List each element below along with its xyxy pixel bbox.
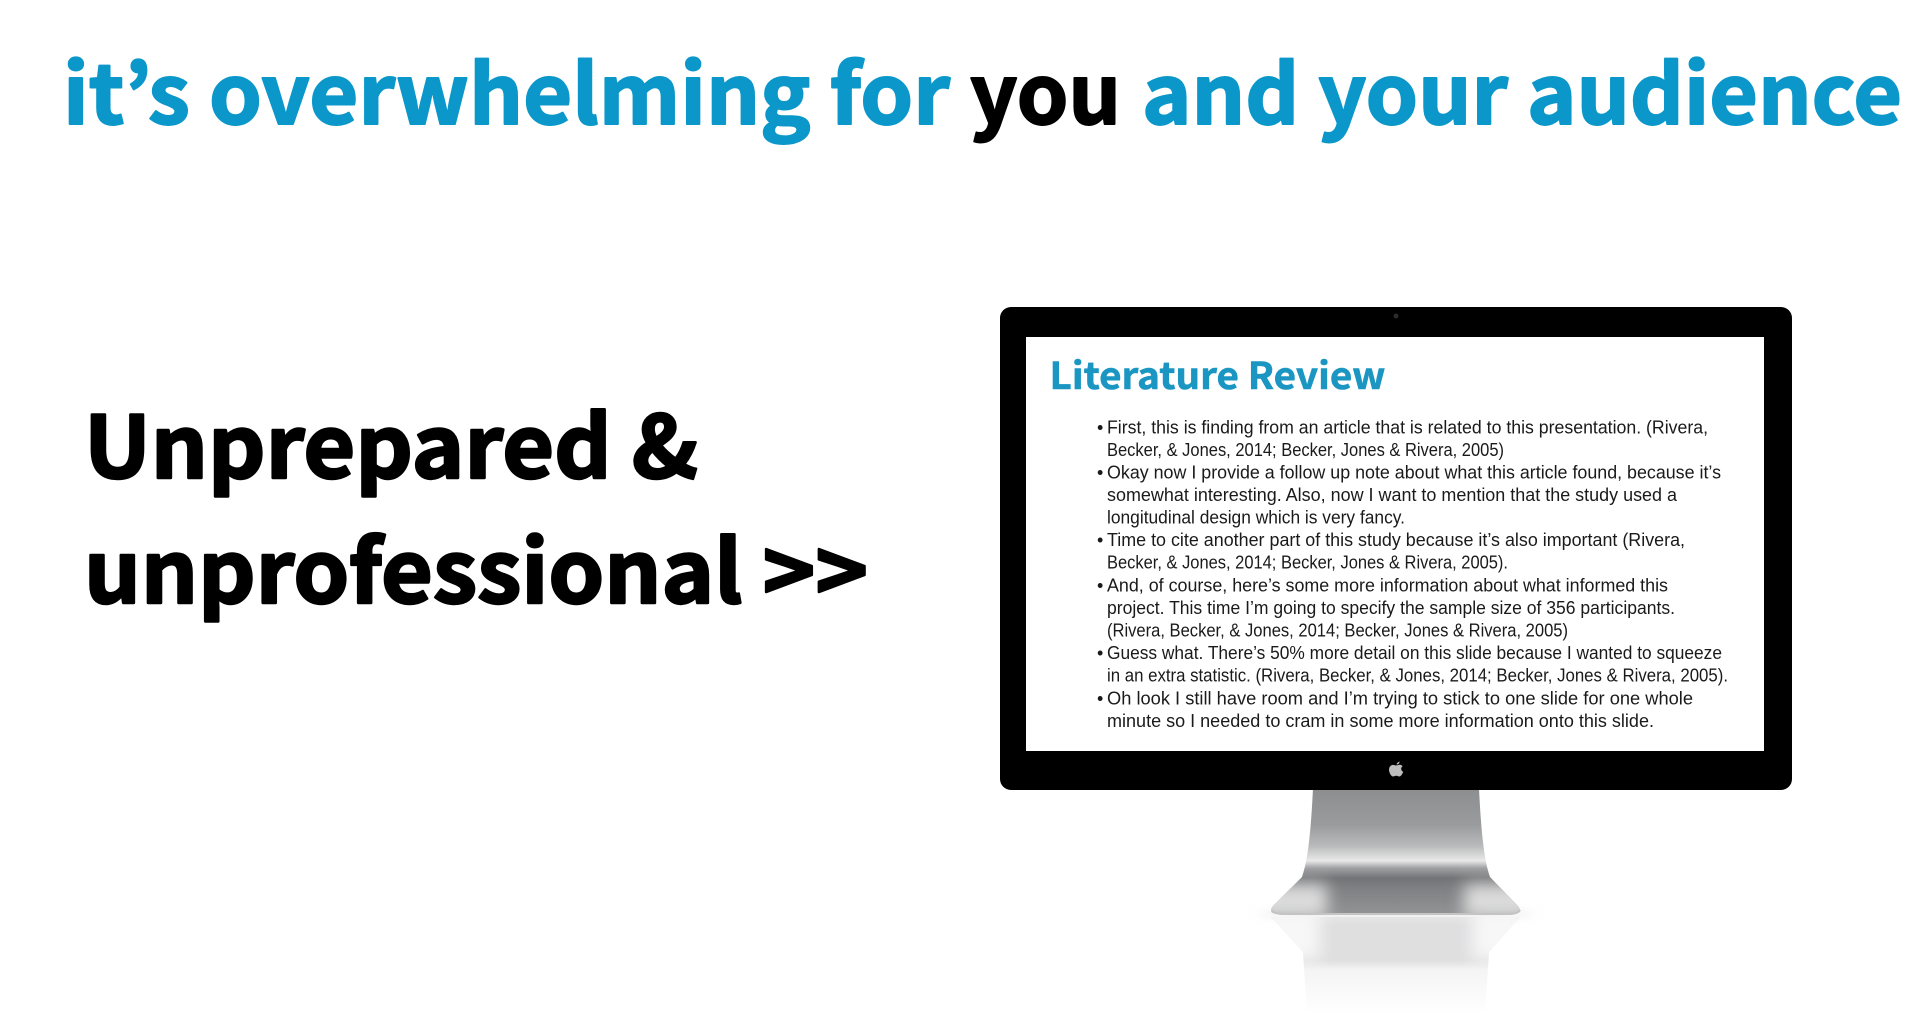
slide bullet list: • [1097,643,1103,663]
title: it’s overwhelming for [63,29,950,148]
title [63,29,1902,148]
slide bullet list: First, this is finding from an article that is related to this presentation. (Rivera, [1107,418,1708,438]
title: and your audience [1142,29,1902,148]
slide bullet list: project. This time I’m going to specify the sample size of 356 participants. [1107,598,1675,618]
slide bullet list: • [1097,576,1103,596]
slide bullet list: Okay now I provide a follow up note about what this article found, because it’s [1107,462,1721,482]
slide bullet list: Time to cite another part of this study because it’s also important (Rivera, [1107,530,1685,550]
slide title: Literature Review [1050,346,1386,400]
slide bullet list: (Rivera, Becker, & Jones, 2014; Becker, Jones & Rivera, 2005) [1107,620,1568,640]
slide bullet list: • [1097,688,1103,708]
monitor stand reflection [1271,915,1520,982]
icon: apple logo [1389,762,1403,776]
slide bullet list: • [1097,418,1103,438]
slide bullet list: Becker, & Jones, 2014; Becker, Jones & Rivera, 2005) [1107,440,1504,460]
screen [1026,337,1764,751]
slide bullet list: And, of course, here’s some more information about what informed this [1107,576,1668,596]
slide bullet list: longitudinal design which is very fancy. [1107,508,1405,528]
slide bullet list: Becker, & Jones, 2014; Becker, Jones & Rivera, 2005). [1107,552,1508,572]
monitor stand [1271,790,1521,915]
monitor bezel [1000,307,1792,790]
slide bullet list: Guess what. There’s 50% more detail on this slide because I wanted to squeeze [1107,643,1722,663]
camera [1394,314,1398,318]
slide bullet list: • [1097,462,1103,482]
slide bullet list: minute so I needed to cram in some more information onto this slide. [1107,711,1654,731]
heading: unprepared and unprofessional: Unprepared & [84,378,698,503]
monitor [1000,307,1792,1016]
title: you [970,29,1121,148]
slide bullet list: Oh look I still have room and I’m trying to stick to one slide for one whole [1107,688,1693,708]
slide bullet list: • [1097,530,1103,550]
heading: unprepared and unprofessional [84,378,868,628]
slide bullet list: somewhat interesting. Also, now I want to mention that the study used a [1107,485,1678,505]
heading: unprepared and unprofessional: unprofessional >> [84,503,868,628]
slide bullet list: in an extra statistic. (Rivera, Becker, & Jones, 2014; Becker, Jones & Rivera, 2005). [1107,666,1728,686]
slide bullet list [1097,418,1728,731]
